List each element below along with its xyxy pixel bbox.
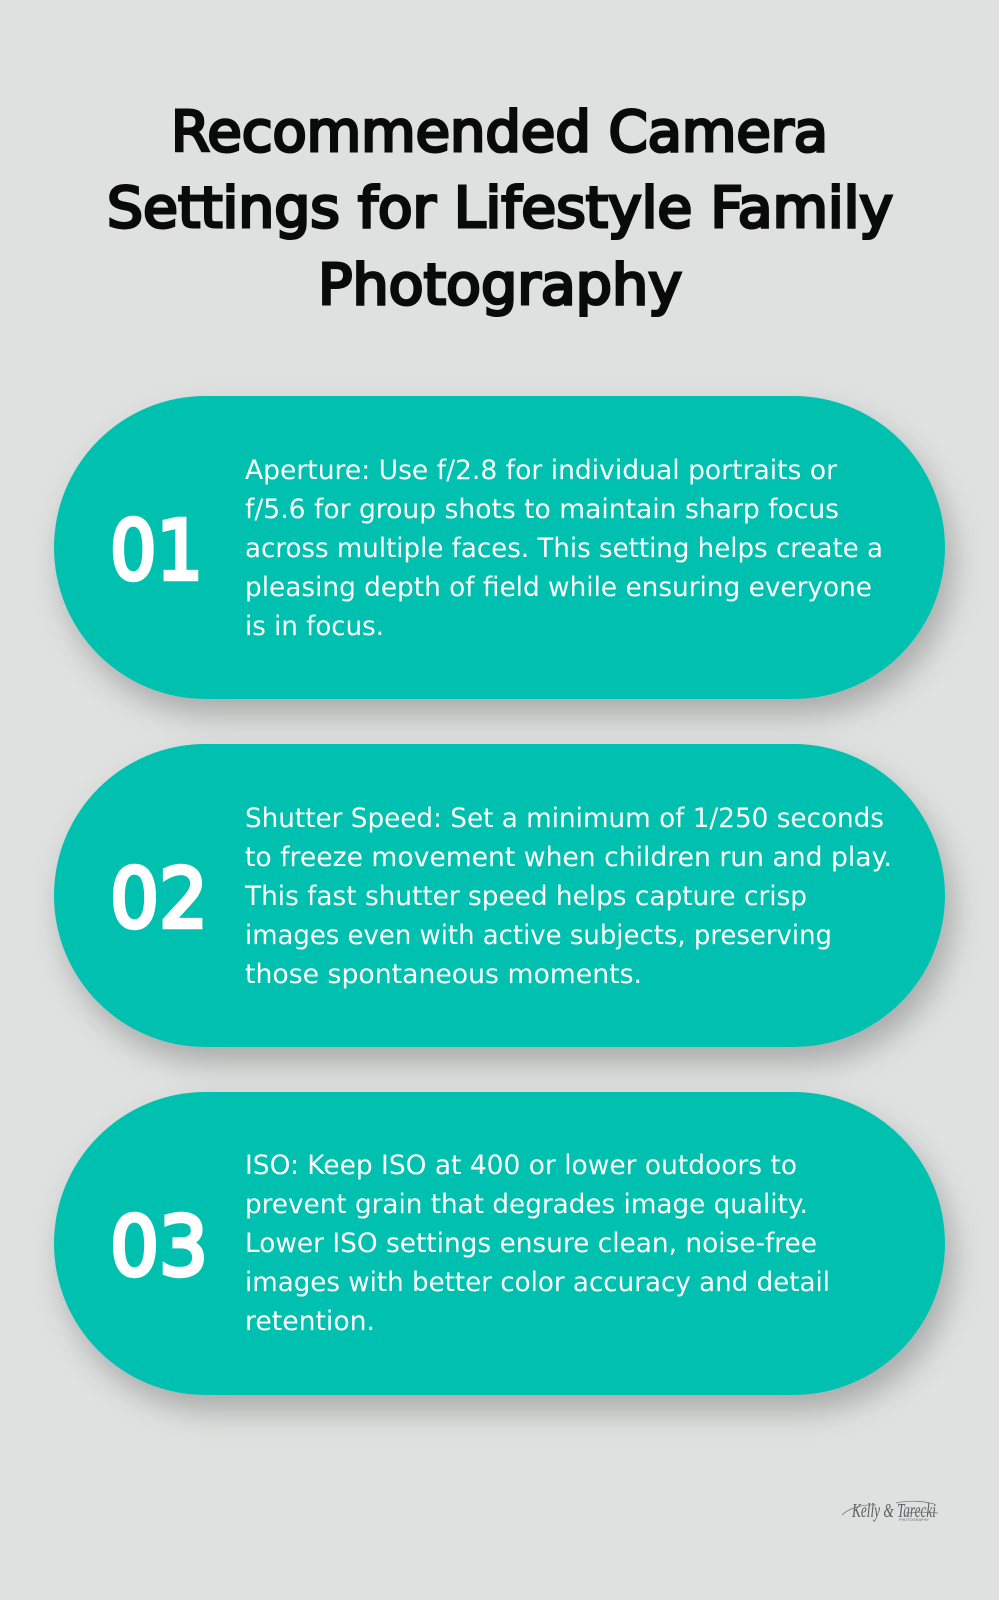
iso text: prevent grain that degrades image quality. [245, 1189, 808, 1220]
logo signature: PHOTOGRAPHY [899, 1518, 930, 1522]
pill background [54, 396, 945, 699]
title: Photography [318, 253, 682, 318]
pill background [54, 1092, 945, 1395]
aperture text: pleasing depth of field while ensuring everyone [245, 572, 872, 603]
shutter speed text: This fast shutter speed helps capture crisp [244, 881, 807, 912]
number 02: 02 [110, 852, 208, 947]
number 01: 01 [110, 504, 203, 599]
shutter speed text: those spontaneous moments. [245, 959, 642, 990]
panel: aperture [54, 396, 945, 699]
aperture text: across multiple faces. This setting helps create a [245, 533, 883, 564]
title: Recommended Camera [171, 100, 828, 165]
shutter speed text [244, 803, 892, 990]
title: Settings for Lifestyle Family [107, 176, 893, 241]
iso text: retention. [245, 1306, 375, 1337]
panel: shutter speed [54, 744, 945, 1047]
iso text: ISO: Keep ISO at 400 or lower outdoors to [245, 1150, 797, 1181]
logo signature [842, 1500, 938, 1522]
title [107, 100, 893, 318]
shutter speed text: Shutter Speed: Set a minimum of 1/250 seconds [245, 803, 884, 834]
logo signature: Kelly & Tarecki [851, 1500, 936, 1522]
panel: iso [54, 1092, 945, 1395]
pill background [54, 744, 945, 1047]
aperture text: Aperture: Use f/2.8 for individual portraits or [245, 455, 838, 486]
shutter speed text: images even with active subjects, preserving [245, 920, 832, 951]
aperture text: is in focus. [245, 611, 384, 642]
shutter speed text: to freeze movement when children run and play. [245, 842, 892, 873]
iso text: images with better color accuracy and detail [245, 1267, 830, 1298]
aperture text [245, 455, 883, 642]
iso text [245, 1150, 830, 1337]
number 03: 03 [110, 1200, 208, 1295]
iso text: Lower ISO settings ensure clean, noise-free [245, 1228, 817, 1259]
aperture text: f/5.6 for group shots to maintain sharp focus [245, 494, 839, 525]
